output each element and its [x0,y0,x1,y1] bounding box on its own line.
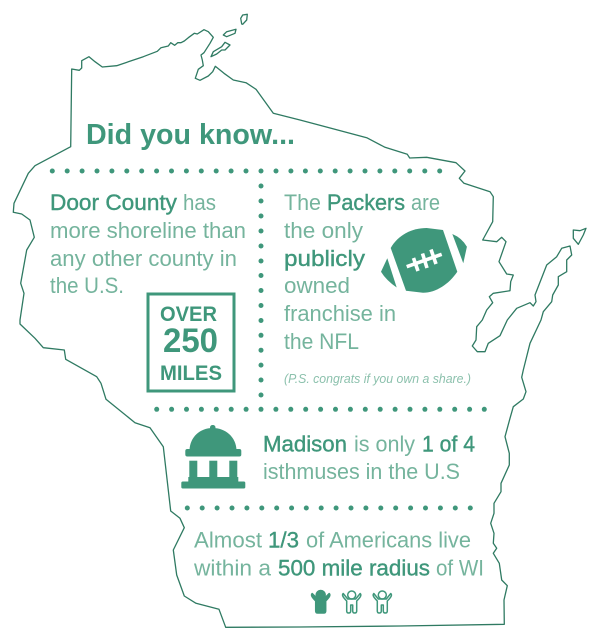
dotted divider: lower horizontal [185,506,473,510]
text block: Madison: 1 of 4 [422,432,475,457]
text block: Madison: Madison [263,432,347,457]
dotted divider: middle horizontal [154,407,487,412]
text block: Packers: the NFL [284,329,359,354]
text block: Madison: isthmuses in the U.S [263,459,460,484]
text block: 500 mile radius: 1/3 [268,528,299,553]
text block: Door County: the U.S. [50,273,124,298]
text block: Packers: the only [284,218,364,243]
text block: Madison [263,432,475,484]
callout: over 250 miles: MILES [160,362,222,385]
text block: Door County: any other county in [50,246,237,271]
text block: Door County: more shoreline than [50,218,246,243]
text block: Packers: franchise in [284,301,396,326]
text block: Packers: publicly [284,246,366,271]
text block: 500 mile radius: within a [193,556,271,581]
callout: over 250 miles: OVER [160,303,217,326]
text block: Madison: is only [354,432,416,457]
callout: over 250 miles [148,294,234,391]
text block: Packers: The [284,190,321,215]
text block: Door County [50,190,246,298]
text block: Door County: has [183,190,216,215]
dotted divider: vertical [258,184,264,398]
icon: capitol dome [181,425,245,488]
text block: 500 mile radius: of Americans live [306,528,471,553]
footnote: (P.S. congrats if you own a share.) [284,372,471,386]
text block: Packers [284,190,440,354]
text block: Packers: Packers [327,190,405,215]
text block: Packers: are [411,190,440,215]
dotted divider: top horizontal [50,168,442,174]
icon: people, one of three filled [312,590,391,613]
title: Did you know... [86,119,295,151]
text block: Door County: Door County [50,190,178,215]
text block: 500 mile radius: 500 mile radius [278,556,430,581]
text block: 500 mile radius [193,528,484,581]
text block: 500 mile radius: of WI [436,556,484,581]
text block: 500 mile radius: Almost [194,528,263,553]
text block: Packers: owned [284,273,350,298]
icon: football [381,228,467,293]
callout: over 250 miles: 250 [163,322,218,360]
